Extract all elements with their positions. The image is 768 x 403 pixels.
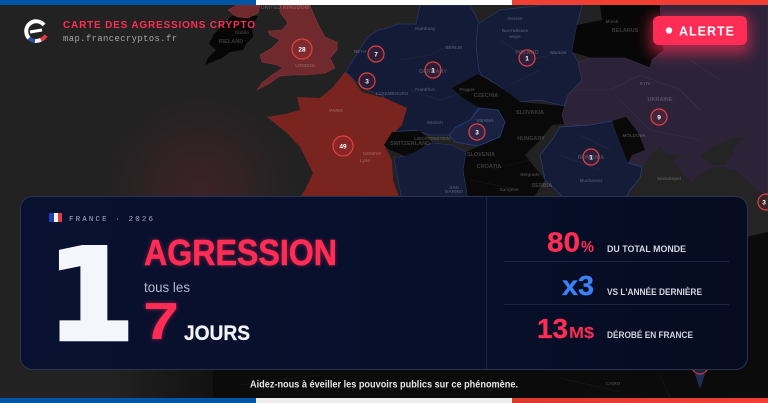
stat: x3 xyxy=(562,270,703,301)
map: Moldova xyxy=(612,117,645,163)
marker: Ukraine 9 xyxy=(651,109,667,125)
map: Romania xyxy=(540,121,642,200)
title: CARTE DES AGRESSIONS CRYPTO xyxy=(63,20,255,31)
map labels: VIENNA xyxy=(476,118,494,123)
map: France xyxy=(267,72,407,200)
marker: Netherlands 7 xyxy=(368,46,384,62)
map: central Europe black countries xyxy=(452,74,565,200)
marker: Poland 1: 1 xyxy=(525,56,529,62)
text: jours: JOURS xyxy=(184,322,250,345)
map labels: SERBIA xyxy=(532,183,552,189)
map labels: Балтийское xyxy=(502,27,529,33)
map labels: CAIRO xyxy=(606,381,621,386)
map labels: POLAND xyxy=(515,50,539,56)
site url: map.francecryptos.fr xyxy=(63,34,177,44)
map labels: MOLDOVA xyxy=(623,133,646,138)
map labels: IRELAND xyxy=(219,39,243,45)
marker: United Kingdom 28 xyxy=(292,39,312,59)
footer message: Aidez-nous à éveiller les pouvoirs publics sur ce phénomène. xyxy=(250,378,518,390)
marker: Romania 1 xyxy=(583,149,599,165)
marker: Egypt pin xyxy=(692,358,708,389)
map labels: CZECHIA xyxy=(474,93,498,99)
stat: 13 million: DÉROBÉ EN FRANCE xyxy=(607,329,694,341)
map labels xyxy=(219,5,681,386)
marker: Ukraine 9: 9 xyxy=(657,114,661,122)
label: France 2026: FRANCE · 2026 xyxy=(69,216,153,224)
marker: Germany 1 xyxy=(425,62,441,78)
marker: Netherlands 7: 7 xyxy=(374,52,378,58)
marker: Poland 1 xyxy=(519,50,535,66)
map labels: море xyxy=(509,34,521,39)
map labels: SLOVENIA xyxy=(467,152,495,158)
map labels: ROMANIA xyxy=(578,155,604,161)
map labels: CROATIA xyxy=(477,164,501,170)
map labels: Belgrade xyxy=(520,172,540,177)
map labels: LUXEMBOURG xyxy=(376,91,409,96)
map labels: NETH xyxy=(354,49,366,54)
map: Black Sea xyxy=(625,147,768,240)
stat: 80 percent: 80 xyxy=(547,226,580,258)
map labels: GERMANY xyxy=(419,69,447,75)
bottom tricolour bar xyxy=(0,398,768,403)
map: regional borders xyxy=(240,40,720,398)
map: Benelux and Germany xyxy=(346,5,482,145)
map labels: Sarajevo xyxy=(500,187,519,192)
map labels: SAN xyxy=(449,185,459,190)
map labels: Sevastopol xyxy=(657,176,681,181)
marker: Belgium 3: 3 xyxy=(365,78,369,86)
text: tous les: tous les xyxy=(144,279,190,295)
big number 1: 1 xyxy=(47,222,135,369)
map labels: BELARUS xyxy=(612,28,639,34)
marker: Austria 3 xyxy=(469,124,485,140)
map labels: Lyon xyxy=(360,158,371,163)
stat: x3: VS L'ANNÉE DERNIÈRE xyxy=(607,286,703,298)
map labels: Minsk xyxy=(606,19,619,24)
map: Poland and Baltic xyxy=(476,5,582,106)
marker: France 49 xyxy=(333,136,353,156)
map labels: Frankfurt xyxy=(415,87,435,92)
logo xyxy=(26,21,46,41)
stat: 80 percent xyxy=(547,226,687,258)
panel divider xyxy=(486,197,488,369)
map labels: KYIV xyxy=(640,81,650,86)
alert button: ALERTE xyxy=(679,24,734,38)
map: Ireland xyxy=(205,16,258,65)
map labels: Warsaw xyxy=(550,50,567,55)
map labels: PARIS xyxy=(329,108,343,113)
stat: 80 percent: DU TOTAL MONDE xyxy=(607,244,687,255)
map: Ukraine and Russia xyxy=(562,5,768,240)
headline: agression: AGRESSION xyxy=(144,232,337,273)
map labels: UNITED KINGDOM xyxy=(261,5,310,11)
number 7: 7 xyxy=(143,293,179,351)
marker: Belgium 3 xyxy=(359,73,375,89)
map labels: HUNGARY xyxy=(517,136,545,142)
stat: 80 percent: % xyxy=(581,239,594,256)
map: United Kingdom xyxy=(228,5,337,90)
map: Africa and Middle East xyxy=(213,232,768,403)
map labels: MARINO xyxy=(445,189,464,194)
stat: 13 million: 13 xyxy=(537,313,568,344)
marker: Romania 1: 1 xyxy=(589,154,593,162)
map: Switzerland xyxy=(384,131,432,156)
map labels: Hamburg xyxy=(415,26,435,31)
map labels: BERLIN xyxy=(446,45,462,50)
marker: Turkey 3 xyxy=(758,194,768,210)
map labels: LONDON xyxy=(295,63,315,68)
flag: France xyxy=(49,213,62,222)
alert button xyxy=(650,16,750,54)
marker: Germany 1: 1 xyxy=(431,68,435,74)
main panel xyxy=(20,196,748,370)
marker: United Kingdom 28: 28 xyxy=(298,46,306,54)
map labels: Prague xyxy=(459,87,475,92)
marker: France 49: 49 xyxy=(339,144,347,150)
marker: Austria 3: 3 xyxy=(475,130,479,136)
map labels: GENEVA xyxy=(363,151,382,156)
map labels: SLOVAKIA xyxy=(516,110,544,116)
marker: Turkey 3: 3 xyxy=(762,200,766,206)
map labels: LIECHTENSTEIN xyxy=(414,136,450,141)
stat: 13 million xyxy=(537,313,694,344)
number 7: 7 xyxy=(143,293,179,351)
stat: 13 million: M$ xyxy=(569,325,594,342)
map labels: Munich xyxy=(427,120,443,125)
map labels: UKRAINE xyxy=(647,97,673,103)
map labels: Bucharest xyxy=(580,178,603,183)
map labels: SWITZERLAND xyxy=(390,141,430,147)
map labels: Ostsee xyxy=(507,16,523,21)
map: Austria xyxy=(449,108,505,146)
map: Belarus xyxy=(572,5,664,68)
map markers xyxy=(292,39,768,389)
map: Italy xyxy=(394,143,468,200)
headline: agression: AGRESSION xyxy=(144,232,337,273)
top tricolour bar xyxy=(0,0,768,5)
stat: x3: x3 xyxy=(562,270,594,301)
map: Sea of Azov xyxy=(700,137,747,165)
map labels: Dublin xyxy=(235,30,249,35)
